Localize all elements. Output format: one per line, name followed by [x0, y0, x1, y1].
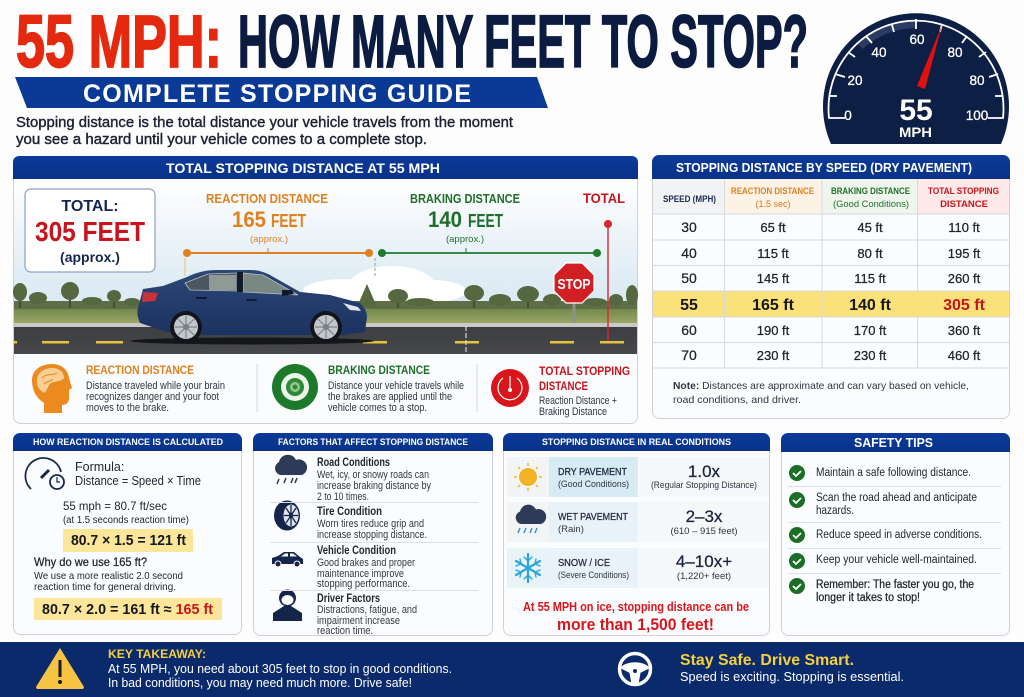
table rows: 145 ft	[757, 271, 790, 286]
factor: road conditions	[275, 455, 432, 503]
speedometer gauge: 80	[947, 45, 963, 60]
braking distance measure: FEET	[468, 211, 503, 231]
icon: tire	[274, 500, 300, 530]
table rows: 195 ft	[948, 246, 981, 261]
speedometer gauge: 0	[844, 108, 852, 123]
icon: sun	[514, 463, 542, 491]
definition: braking distance: vehicle comes to a stop.	[328, 402, 427, 414]
definition: braking distance: BRAKING DISTANCE	[328, 365, 430, 377]
stop sign	[554, 263, 594, 323]
highlighted row 55 mph: 55	[680, 297, 698, 314]
factor: driver factors	[273, 590, 417, 637]
subtitle ribbon: COMPLETE STOPPING GUIDE	[83, 80, 471, 108]
slogan: Speed is exciting. Stopping is essential.	[680, 669, 904, 684]
header: SAFETY TIPS	[854, 435, 933, 450]
table column headers: SPEED (MPH)	[663, 194, 716, 204]
panel header	[13, 156, 638, 179]
intro text: you see a hazard until your vehicle comes to a complete stop.	[16, 132, 427, 148]
definition: reaction distance: Distance traveled while your brain	[86, 380, 225, 392]
row: dry pavement	[507, 457, 769, 497]
braking distance measure: 140	[428, 207, 462, 232]
slogan	[680, 652, 904, 684]
table column headers: (Good Conditions)	[833, 199, 909, 209]
icon: gauge with clock	[25, 458, 64, 489]
header: HOW REACTION DISTANCE IS CALCULATED	[33, 437, 223, 448]
highlighted row 55 mph: 305 ft	[943, 297, 986, 314]
highlighted row 55 mph: 140 ft	[849, 297, 892, 314]
factor: tire condition: Worn tires reduce grip and	[317, 518, 424, 530]
row: wet pavement: (Rain)	[558, 524, 584, 535]
total marker	[583, 190, 625, 341]
braking distance measure: BRAKING DISTANCE	[410, 191, 520, 206]
result box 165 ft: 80.7 × 2.0 = 161 ft ≈ 165 ft	[42, 602, 213, 618]
definition: reaction distance: recognizes danger and your foot	[86, 391, 219, 403]
definition: reaction distance: REACTION DISTANCE	[86, 365, 194, 377]
table rows: 80 ft	[857, 246, 883, 261]
definition: total stopping distance: DISTANCE	[539, 379, 588, 393]
total callout box	[25, 189, 155, 272]
tips list: Scan the road ahead and anticipate	[816, 492, 977, 504]
table rows: 115 ft	[854, 271, 886, 286]
row: dry pavement: DRY PAVEMENT	[558, 466, 627, 478]
header	[781, 433, 1010, 452]
table rows: 40	[681, 245, 697, 261]
speedometer gauge	[823, 13, 1009, 144]
formula: Formula:	[75, 460, 124, 474]
panel header: TOTAL STOPPING DISTANCE AT 55 MPH	[166, 161, 440, 176]
header: STOPPING DISTANCE IN REAL CONDITIONS	[542, 437, 731, 448]
reaction distance measure: 165	[232, 207, 266, 232]
definition: reaction distance	[32, 364, 225, 414]
panel: stopping distance in real conditions	[503, 433, 770, 636]
definition: braking distance: the brakes are applied until the	[328, 391, 452, 403]
factor: tire condition: Tire Condition	[317, 506, 382, 518]
factor: vehicle condition: maintenance improve	[317, 568, 404, 580]
factor: driver factors: Driver Factors	[317, 593, 380, 605]
reaction distance measure	[183, 191, 375, 276]
factor: tire condition	[274, 500, 427, 541]
row: snow and ice: 4–10x+	[676, 552, 732, 571]
formula: Distance = Speed × Time	[75, 474, 201, 488]
formula	[75, 460, 201, 488]
table rows: 230 ft	[757, 348, 790, 363]
factor: vehicle condition: Vehicle Condition	[317, 545, 396, 557]
row: dry pavement: (Good Conditions)	[558, 479, 629, 490]
row: dry pavement: 1.0x	[688, 462, 721, 481]
why 165 ft	[34, 555, 183, 593]
tips list	[816, 467, 982, 604]
highlighted row 55 mph: 165 ft	[752, 297, 795, 314]
table rows: 60	[681, 322, 697, 338]
subtitle ribbon	[15, 77, 548, 108]
speedometer gauge: 100	[966, 108, 988, 123]
why 165 ft: We use a more realistic 2.0 second	[34, 570, 183, 582]
table rows: 30	[681, 219, 697, 235]
result box 121 ft	[63, 529, 193, 552]
table header bar: STOPPING DISTANCE BY SPEED (DRY PAVEMENT)	[676, 160, 972, 175]
ice warning callout: more than 1,500 feet!	[557, 616, 714, 634]
why 165 ft: Why do we use 165 ft?	[34, 555, 147, 569]
table column headers: TOTAL STOPPING	[928, 186, 999, 197]
speedometer gauge: 40	[871, 45, 887, 60]
table column headers: (1.5 sec)	[755, 199, 791, 209]
key takeaway: In bad conditions, you may need much more. Drive safe!	[108, 675, 412, 690]
row: snow and ice: SNOW / ICE	[558, 557, 610, 569]
panel: safety tips	[781, 433, 1010, 636]
speedometer gauge: 80	[969, 73, 985, 88]
factor: road conditions: increase braking distance by	[317, 480, 432, 492]
speedometer gauge: 55	[899, 94, 933, 127]
icon: stopwatch dial	[491, 369, 529, 407]
ice warning callout	[523, 600, 749, 634]
row: snow and ice: (1,220+ feet)	[677, 571, 731, 582]
title	[16, 0, 808, 83]
why 165 ft: reaction time for general driving.	[34, 581, 176, 593]
row: wet pavement: (610 – 915 feet)	[670, 526, 738, 537]
factor: road conditions: Wet, icy, or snowy roads can	[317, 469, 429, 481]
footer banner	[0, 642, 1024, 697]
definition: total stopping distance	[491, 364, 630, 418]
factor: driver factors: impairment increase	[317, 615, 400, 627]
total callout box: TOTAL:	[61, 198, 119, 215]
conversion	[63, 499, 189, 526]
icon: car	[272, 552, 303, 567]
panel: total stopping distance	[13, 156, 638, 424]
key takeaway: At 55 MPH, you need about 305 feet to stop in good conditions.	[108, 661, 452, 676]
braking distance measure	[378, 191, 601, 257]
reaction distance measure: (approx.)	[250, 234, 288, 245]
tips list: longer it takes to stop!	[816, 592, 920, 604]
table header bar	[652, 155, 1010, 179]
table note: road conditions, and driver.	[673, 394, 801, 406]
row: snow and ice	[507, 548, 769, 588]
header: FACTORS THAT AFFECT STOPPING DISTANCE	[278, 437, 468, 448]
row: snow and ice: (Severe Conditions)	[558, 570, 629, 581]
total callout box: (approx.)	[60, 249, 120, 265]
tips list: Remember: The faster you go, the	[816, 579, 974, 591]
key takeaway: KEY TAKEAWAY:	[108, 647, 206, 661]
icon: rain cloud	[275, 455, 307, 484]
check icons	[789, 465, 805, 594]
definition: braking distance	[272, 364, 464, 414]
table rows: 110 ft	[948, 220, 980, 235]
speedometer gauge: 20	[847, 73, 863, 88]
table rows: 360 ft	[948, 323, 981, 338]
table note	[673, 380, 969, 406]
reaction distance measure: FEET	[271, 211, 306, 231]
table rows: 230 ft	[854, 348, 887, 363]
definition: total stopping distance: Braking Distance	[539, 406, 607, 418]
highlighted row 55 mph	[653, 291, 1009, 317]
definition: braking distance: Distance your vehicle travels while	[328, 380, 464, 392]
icon: rain cloud	[516, 505, 546, 533]
car	[130, 270, 374, 344]
tips list: Reduce speed in adverse conditions.	[816, 529, 982, 541]
row: wet pavement: WET PAVEMENT	[558, 511, 628, 523]
panel: how reaction distance is calculated	[13, 433, 242, 634]
table rows: 190 ft	[757, 323, 790, 338]
braking distance measure: (approx.)	[446, 234, 484, 245]
table rows	[681, 219, 981, 363]
tips list: Maintain a safe following distance.	[816, 467, 971, 479]
intro text: Stopping distance is the total distance your vehicle travels from the moment	[16, 115, 513, 131]
conversion: 55 mph = 80.7 ft/sec	[63, 499, 167, 513]
factor: vehicle condition: stopping performance.	[317, 578, 410, 590]
table column headers: DISTANCE	[940, 199, 988, 210]
intro text	[16, 115, 513, 148]
header	[253, 433, 493, 451]
icon: snowflake	[516, 554, 540, 582]
total marker: TOTAL	[583, 190, 625, 206]
header	[13, 433, 242, 451]
table rows: 460 ft	[948, 348, 981, 363]
row: wet pavement	[507, 502, 769, 542]
header	[503, 433, 770, 451]
factor: driver factors: Distractions, fatigue, and	[317, 604, 417, 616]
icon: steering wheel	[620, 654, 650, 684]
stop sign: STOP	[558, 276, 590, 293]
table column headers: REACTION DISTANCE	[731, 186, 814, 197]
tips list: hazards.	[816, 505, 854, 517]
table rows: 260 ft	[948, 271, 981, 286]
row: wet pavement: 2–3x	[686, 507, 723, 526]
table rows: 70	[681, 347, 697, 363]
icon: brake disc	[272, 364, 318, 410]
title: 55 MPH:	[16, 0, 222, 83]
slogan: Stay Safe. Drive Smart.	[680, 652, 854, 669]
icon: driver	[273, 590, 302, 621]
factor: tire condition: increase stopping distance.	[317, 529, 427, 541]
table rows: 115 ft	[757, 246, 789, 261]
definition: reaction distance: moves to the brake.	[86, 402, 169, 414]
conversion: (at 1.5 seconds reaction time)	[63, 515, 189, 526]
speedometer gauge: 60	[909, 32, 925, 47]
table column headers	[653, 179, 1009, 214]
factor: vehicle condition	[272, 545, 415, 590]
row: dry pavement: (Regular Stopping Distance)	[651, 480, 757, 491]
table column headers: BRAKING DISTANCE	[831, 186, 910, 197]
table rows: 170 ft	[854, 323, 887, 338]
result box 165 ft	[34, 598, 222, 620]
total callout box: 305 FEET	[35, 216, 145, 247]
table note: Note: Distances are approximate and can vary based on vehicle,	[673, 380, 969, 392]
factor: vehicle condition: Good brakes and proper	[317, 557, 415, 569]
icon: warning triangle	[36, 648, 84, 689]
definition: total stopping distance: Reaction Distance +	[539, 395, 617, 407]
panel: factors that affect stopping distance	[253, 433, 493, 637]
definition: total stopping distance: TOTAL STOPPING	[539, 364, 630, 378]
tips list: Keep your vehicle well-maintained.	[816, 554, 977, 566]
factor: driver factors: reaction time.	[317, 625, 373, 637]
icon: head with brain	[32, 364, 72, 413]
table rows: 45 ft	[857, 220, 883, 235]
result box 121 ft: 80.7 × 1.5 = 121 ft	[71, 533, 186, 549]
table rows: 65 ft	[760, 220, 786, 235]
road scene	[13, 179, 638, 354]
key takeaway	[108, 647, 452, 690]
factor: road conditions: 2 to 10 times.	[317, 491, 369, 503]
panel: stopping distance by speed table	[652, 155, 1010, 418]
table rows: 50	[681, 270, 697, 286]
factor: road conditions: Road Conditions	[317, 457, 390, 469]
reaction distance measure: REACTION DISTANCE	[206, 191, 328, 206]
ice warning callout: At 55 MPH on ice, stopping distance can be	[523, 600, 749, 614]
speedometer gauge: MPH	[899, 124, 932, 140]
